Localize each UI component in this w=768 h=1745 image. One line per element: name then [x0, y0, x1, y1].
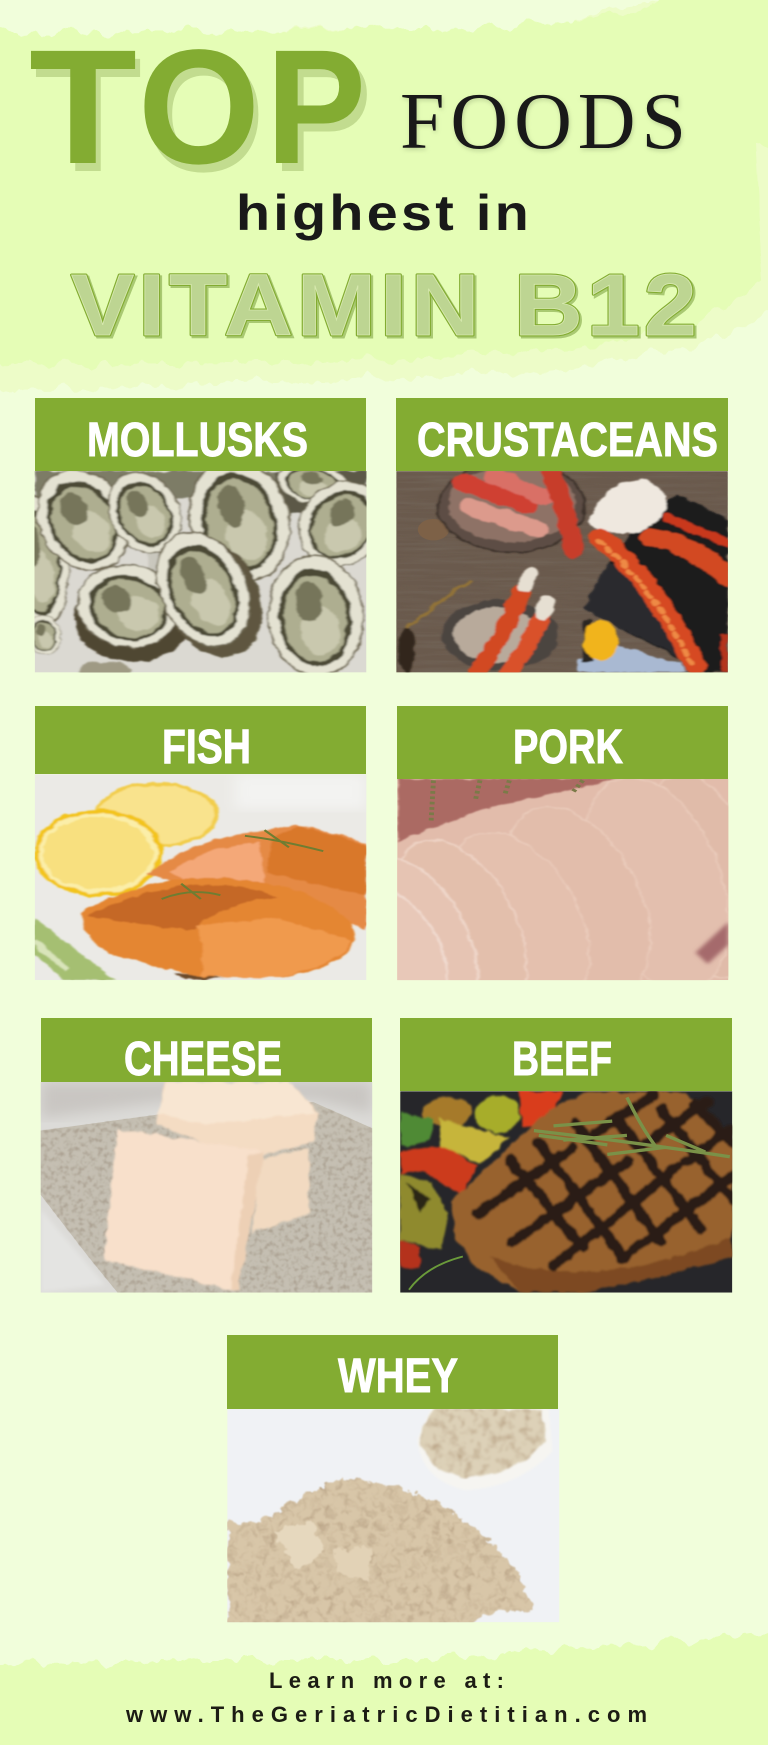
woven net [41, 1102, 372, 1293]
label: PORK: PORK [513, 721, 623, 774]
photo: cheese cubes [41, 1082, 372, 1293]
heading: VITAMIN B12: VITAMIN B12 [71, 257, 701, 354]
photo: sliced pork [397, 779, 728, 980]
steak [451, 1091, 732, 1293]
photo: grilled steak [400, 1091, 732, 1293]
dill [162, 830, 323, 899]
photo: oysters [34, 471, 366, 672]
heading: VITAMIN B12: VITAMIN B12 [71, 257, 701, 354]
heading: TOP: O [138, 15, 260, 198]
brass spoon [407, 579, 470, 627]
header bar [227, 1335, 558, 1409]
label: CHEESE: CHEESE [124, 1033, 282, 1086]
photo: whey powder [227, 1408, 559, 1627]
powder pile [227, 1477, 534, 1627]
plate [438, 462, 585, 552]
header bar [397, 706, 728, 779]
heading: VITAMIN B12: VITAMIN B12 [73, 259, 703, 356]
label: BEEF: BEEF [512, 1033, 612, 1086]
panel: beef [400, 1018, 732, 1293]
header bar [35, 398, 366, 471]
panel: pork [397, 706, 728, 980]
header bar [400, 1018, 732, 1091]
text: website: www.TheGeriatricDietitian.com [125, 1702, 647, 1727]
panel: whey [227, 1335, 559, 1627]
asparagus [35, 918, 115, 980]
heading: FOODS: FOODS [401, 80, 687, 168]
heading: TOP: T [34, 23, 142, 206]
back salmon [147, 824, 366, 930]
heading: TOP: P [266, 15, 366, 198]
heading: FOODS: FOODS [400, 78, 686, 166]
panel: fish [33, 706, 366, 980]
white crab meat [588, 479, 667, 533]
black tray [583, 493, 728, 672]
front salmon [81, 878, 355, 977]
panel: mollusks [34, 398, 366, 672]
heading: TOP: T [29, 15, 137, 198]
top brush band [0, 0, 768, 390]
heading: TOP: P [272, 23, 372, 206]
panel: crustaceans [396, 398, 728, 673]
label: MOLLUSKS: MOLLUSKS [87, 414, 308, 467]
heading: highest in: highest in [236, 185, 532, 241]
photo: crab legs [396, 462, 728, 673]
lemons [94, 782, 219, 847]
bottom brush band [0, 1628, 768, 1745]
heading: TOP: O [143, 23, 265, 206]
small plate [442, 600, 557, 670]
footer text [125, 1668, 647, 1727]
header bar [41, 1018, 372, 1082]
label: WHEY: WHEY [338, 1350, 458, 1403]
label: FISH: FISH [162, 721, 251, 774]
header bar [35, 706, 366, 774]
spoon of powder [417, 1408, 552, 1490]
title [29, 15, 703, 356]
panel: cheese [41, 1018, 372, 1293]
heading: TOP [29, 15, 372, 206]
text: learn more: Learn more at: [269, 1668, 504, 1693]
photo: salmon [33, 774, 366, 980]
cloth and lemon [578, 644, 686, 672]
rosemary [534, 1097, 730, 1157]
header bar [396, 398, 728, 471]
